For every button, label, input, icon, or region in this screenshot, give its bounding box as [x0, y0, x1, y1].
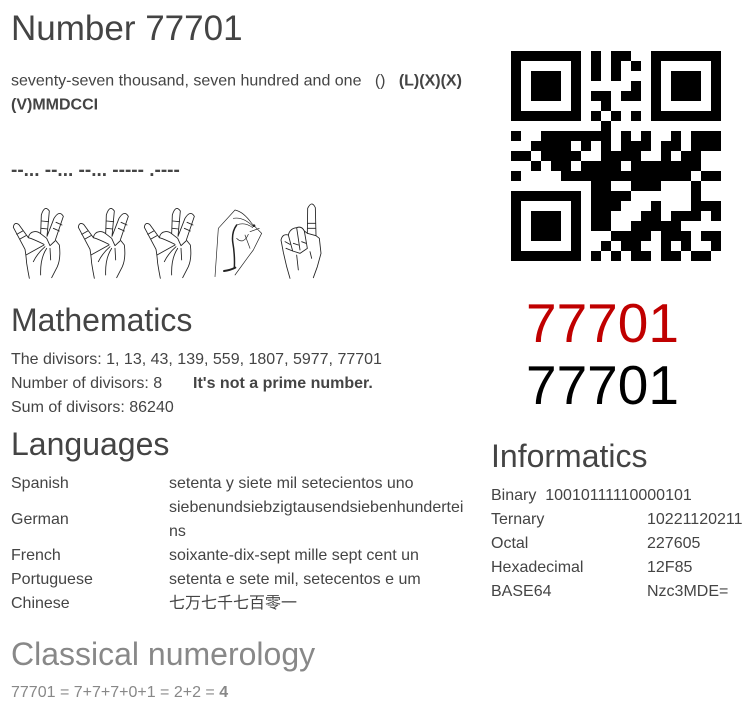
big number red: 77701 — [526, 292, 679, 354]
text: numerology sum: 77701 = 7+7+7+0+1 = 2+2 = 4 — [11, 684, 228, 701]
Chinese: Chinese — [11, 595, 70, 612]
German value — [169, 499, 463, 540]
heading: informatics: Informatics — [491, 438, 647, 474]
Binary: Binary 10010111110000101 — [491, 487, 692, 504]
Hexadecimal: Hexadecimal — [491, 559, 583, 576]
QR code — [511, 51, 721, 261]
Chinese value: 七万七千七百零一 — [169, 595, 297, 612]
Octal value: 227605 — [647, 535, 700, 552]
German value: ns — [169, 523, 186, 540]
title: Number 77701 — [11, 9, 243, 48]
table: informatics — [491, 487, 743, 600]
text: prime status: It's not a prime number. — [193, 375, 373, 392]
number in words and roman numeral: seventy-seven thousand, seven hundred and one () (L)(X)(X) — [11, 72, 462, 90]
Portuguese value: setenta e sete mil, setecentos e um — [169, 571, 421, 588]
hand: seven — [78, 208, 128, 278]
hand: one — [281, 204, 321, 278]
French: French — [11, 547, 61, 564]
French value: soixante-dix-sept mille sept cent un — [169, 547, 419, 564]
number in words and roman numeral — [11, 72, 462, 114]
BASE64 value: Nzc3MDE= — [647, 583, 728, 600]
Portuguese: Portuguese — [11, 571, 93, 588]
text: divisors: The divisors: 1, 13, 43, 139, 559, 1807, 5977, 77701 — [11, 351, 382, 368]
hand: seven — [144, 208, 194, 278]
morse code: --... --... --... ----- .---- — [11, 160, 180, 181]
Octal: Octal — [491, 535, 528, 552]
number in words and roman numeral: (V)MMDCCI — [11, 96, 98, 114]
Ternary: Ternary — [491, 511, 544, 528]
German: German — [11, 511, 69, 528]
Spanish value: setenta y siete mil setecientos uno — [169, 475, 414, 492]
BASE64: BASE64 — [491, 583, 551, 600]
heading: classical numerology: Classical numerology — [11, 636, 315, 672]
Ternary value: 10221120211 — [647, 511, 743, 528]
German value: siebenundsiebzigtausendsiebenhundertei — [169, 499, 463, 516]
heading: languages: Languages — [11, 426, 169, 462]
table: languages — [11, 475, 463, 612]
icon: sign language hands — [12, 204, 322, 279]
text: number of divisors: Number of divisors: 8 — [11, 375, 162, 392]
big number black: 77701 — [526, 354, 679, 416]
Hexadecimal value: 12F85 — [647, 559, 692, 576]
text: sum of divisors: Sum of divisors: 86240 — [11, 399, 174, 416]
hand: seven — [13, 208, 63, 278]
hand: zero — [215, 210, 262, 277]
heading: mathematics: Mathematics — [11, 302, 192, 338]
Spanish: Spanish — [11, 475, 69, 492]
